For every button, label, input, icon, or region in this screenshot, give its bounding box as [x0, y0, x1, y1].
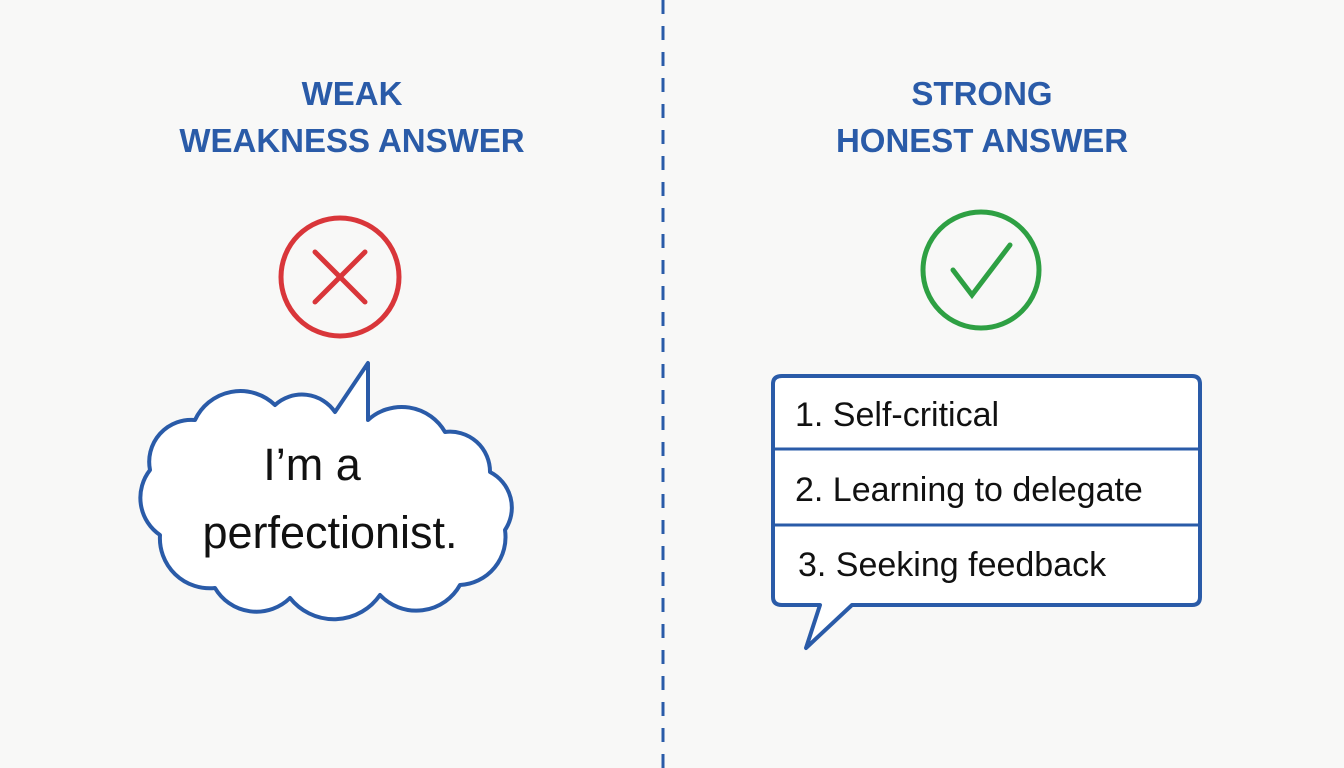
list items: 3. Seeking feedback — [798, 546, 1107, 584]
icon: green check — [923, 212, 1039, 328]
heading: strong honest answer — [836, 75, 1128, 159]
heading: weak weakness answer: WEAK — [302, 75, 403, 112]
cloud text — [202, 439, 458, 558]
list items — [795, 396, 1143, 584]
icon: red cross — [281, 218, 399, 336]
heading: weak weakness answer — [179, 75, 525, 159]
list items: 2. Learning to delegate — [795, 471, 1143, 509]
heading: strong honest answer: STRONG — [911, 75, 1053, 112]
cloud text: perfectionist. — [202, 507, 458, 558]
cloud bubble: weak answer — [140, 363, 512, 619]
list items: 1. Self-critical — [795, 396, 999, 434]
cloud text: I’m a — [263, 439, 362, 490]
heading: strong honest answer: HONEST ANSWER — [836, 122, 1128, 159]
list bubble: strong answer — [773, 376, 1200, 648]
heading: weak weakness answer: WEAKNESS ANSWER — [179, 122, 525, 159]
